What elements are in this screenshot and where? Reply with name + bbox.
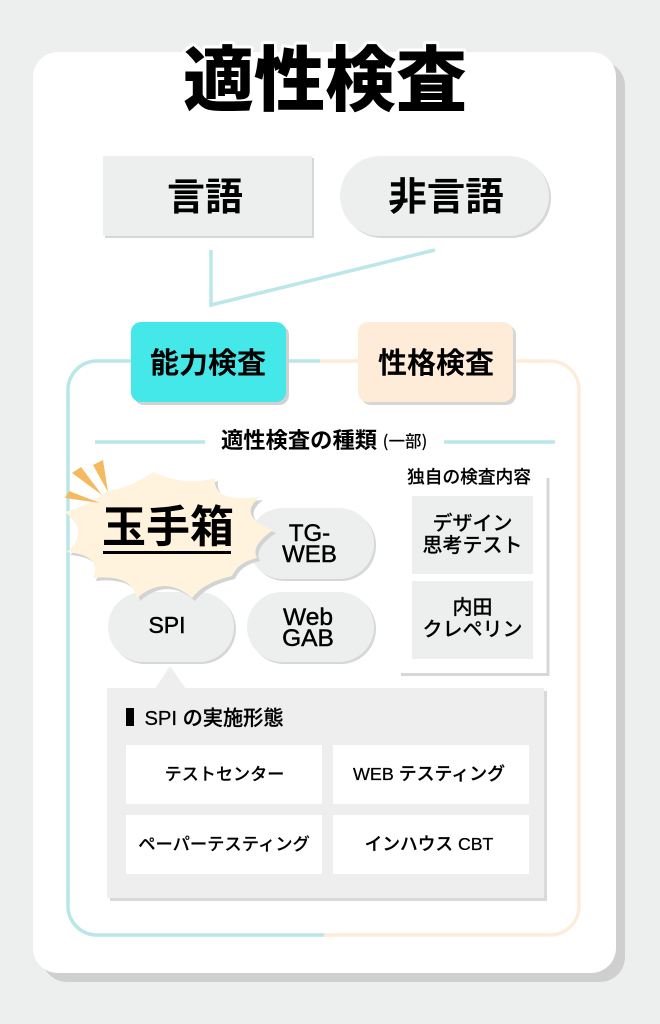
panel: 独自の検査内容: クレペリン (422, 613, 522, 642)
callout: 玉手箱 burst: 玉手箱 (102, 491, 234, 555)
panel: SPI の実施形態: WEB テスティング (353, 764, 505, 784)
panel: 独自の検査内容: 思考テスト (422, 529, 522, 558)
box: 能力検査 (131, 322, 289, 405)
pill: Web GAB: Web (283, 604, 333, 631)
pill: Web GAB: GAB (282, 625, 334, 652)
pill: SPI (108, 592, 236, 664)
section heading: 適性検査の種類 (95, 423, 555, 455)
section heading: 適性検査の種類: (一部) (383, 428, 427, 452)
title: 適性検査 (183, 24, 467, 126)
box: 言語: 言語 (167, 166, 243, 221)
panel: SPI の実施形態: ペーパーテスティング (138, 830, 310, 855)
box: 非言語 (340, 156, 551, 238)
panel: 独自の検査内容: デザイン (432, 507, 512, 536)
section heading: 適性検査の種類: 適性検査の種類 (221, 423, 377, 455)
panel: SPI の実施形態: インハウス CBT (365, 834, 494, 854)
box: 性格検査: 性格検査 (378, 340, 494, 382)
panel: SPI の実施形態: テストセンター (165, 760, 284, 785)
panel: 独自の検査内容: 内田 (452, 591, 492, 620)
panel: SPI の実施形態: SPI の実施形態 (144, 707, 284, 730)
pill: TG-WEB (248, 508, 376, 581)
frame: personality side (320, 361, 579, 935)
callout: 玉手箱 burst (65, 460, 276, 601)
pill: TG-WEB: WEB (282, 541, 337, 568)
frame: ability side (68, 361, 324, 935)
pill: SPI: SPI (148, 612, 186, 638)
panel: SPI の実施形態 (107, 666, 547, 901)
panel: 独自の検査内容 (401, 463, 548, 674)
pill: TG-WEB: TG- (289, 520, 330, 547)
box: 能力検査: 能力検査 (150, 340, 266, 382)
panel: 独自の検査内容: 独自の検査内容 (407, 463, 531, 489)
box: 言語 (103, 156, 314, 238)
box: 性格検査 (358, 322, 516, 405)
pill: Web GAB (247, 592, 376, 664)
connector lines (211, 250, 435, 305)
box: 非言語: 非言語 (388, 166, 504, 222)
